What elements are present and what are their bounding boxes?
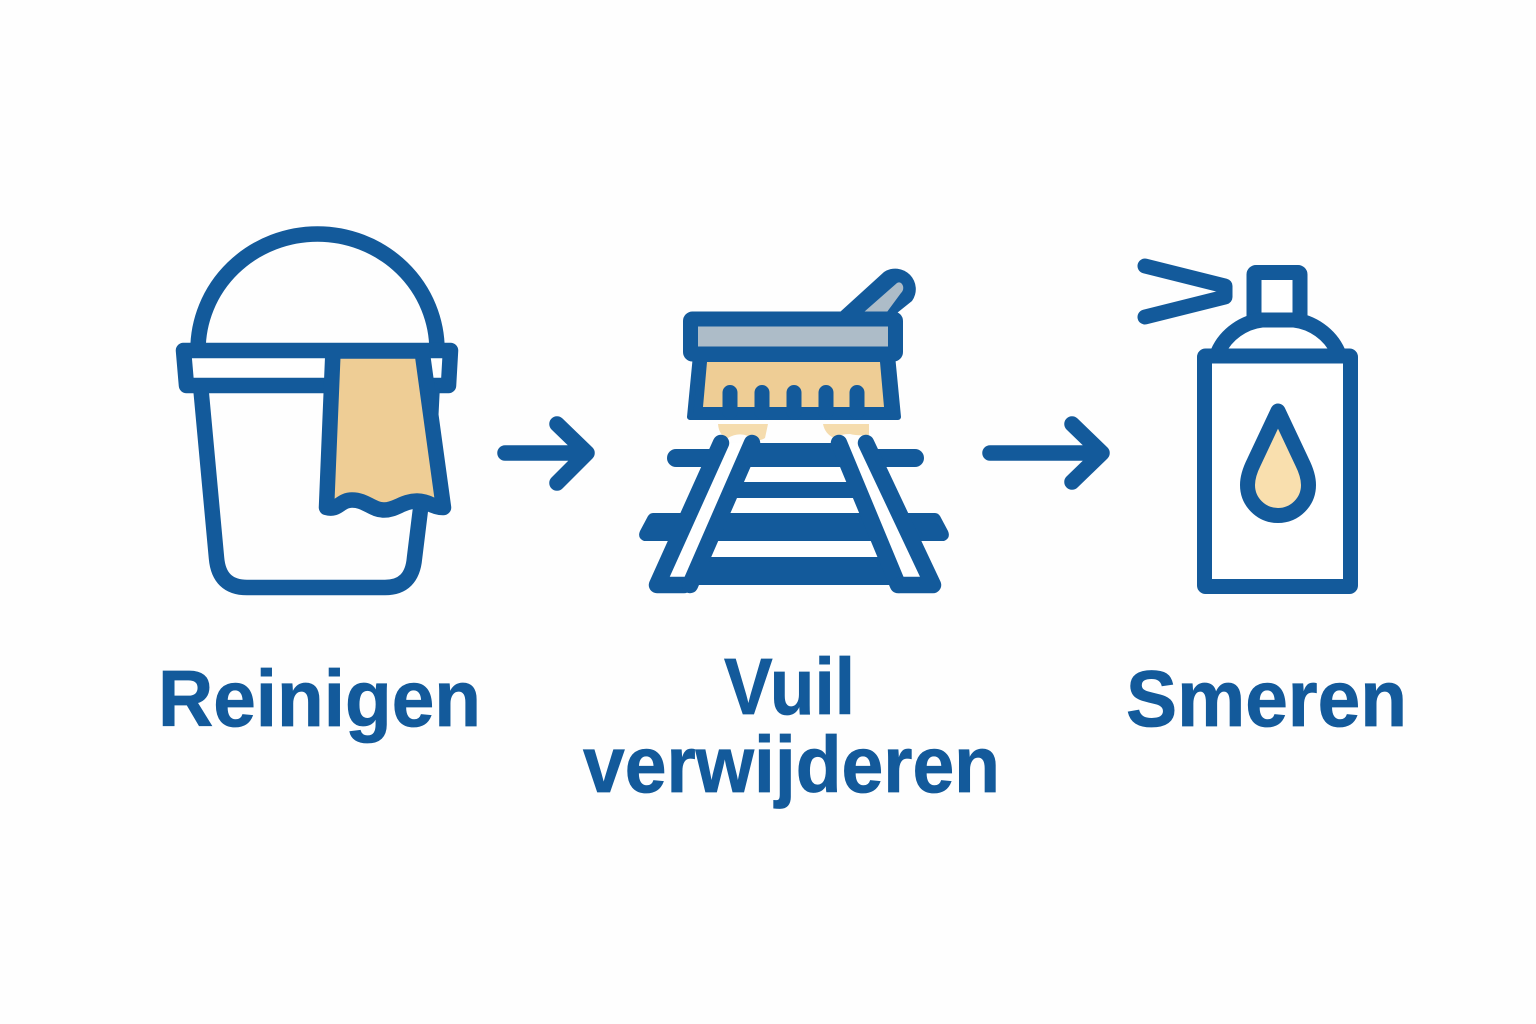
cloth [326, 351, 444, 510]
label: Vuil verwijderen: Vuil [724, 642, 855, 731]
brush block [690, 319, 896, 354]
label: Vuil verwijderen [583, 642, 1000, 809]
label: Smeren: Smeren [1126, 654, 1407, 743]
bucket right side [430, 390, 432, 430]
railway rails [657, 443, 933, 585]
arrow: dirt removal to lubrication [990, 424, 1102, 482]
gaps between sleepers [660, 443, 930, 578]
brush handle highlight [864, 282, 903, 312]
oil drop [1248, 411, 1308, 515]
icon: brush over railway track [639, 269, 949, 585]
can dome [1218, 320, 1338, 352]
label: Reinigen: Reinigen [158, 654, 481, 743]
bucket body [201, 390, 421, 588]
railway sleepers [639, 449, 949, 541]
label: Vuil verwijderen: verwijderen [583, 720, 1000, 809]
icon: bucket with cloth [184, 234, 450, 588]
icon: spray can [1145, 266, 1350, 586]
spray lines [1145, 266, 1225, 317]
bristle teeth [730, 392, 857, 412]
brush handle [840, 269, 916, 313]
brush bristles [690, 355, 898, 417]
arrow: cleaning to dirt removal [505, 424, 587, 483]
dirt patches [718, 424, 869, 441]
bristle fill [703, 362, 884, 407]
bucket rim [184, 350, 450, 386]
can body [1204, 356, 1350, 586]
bucket handle [198, 234, 437, 350]
can nozzle [1254, 272, 1300, 320]
track bed [690, 443, 897, 585]
